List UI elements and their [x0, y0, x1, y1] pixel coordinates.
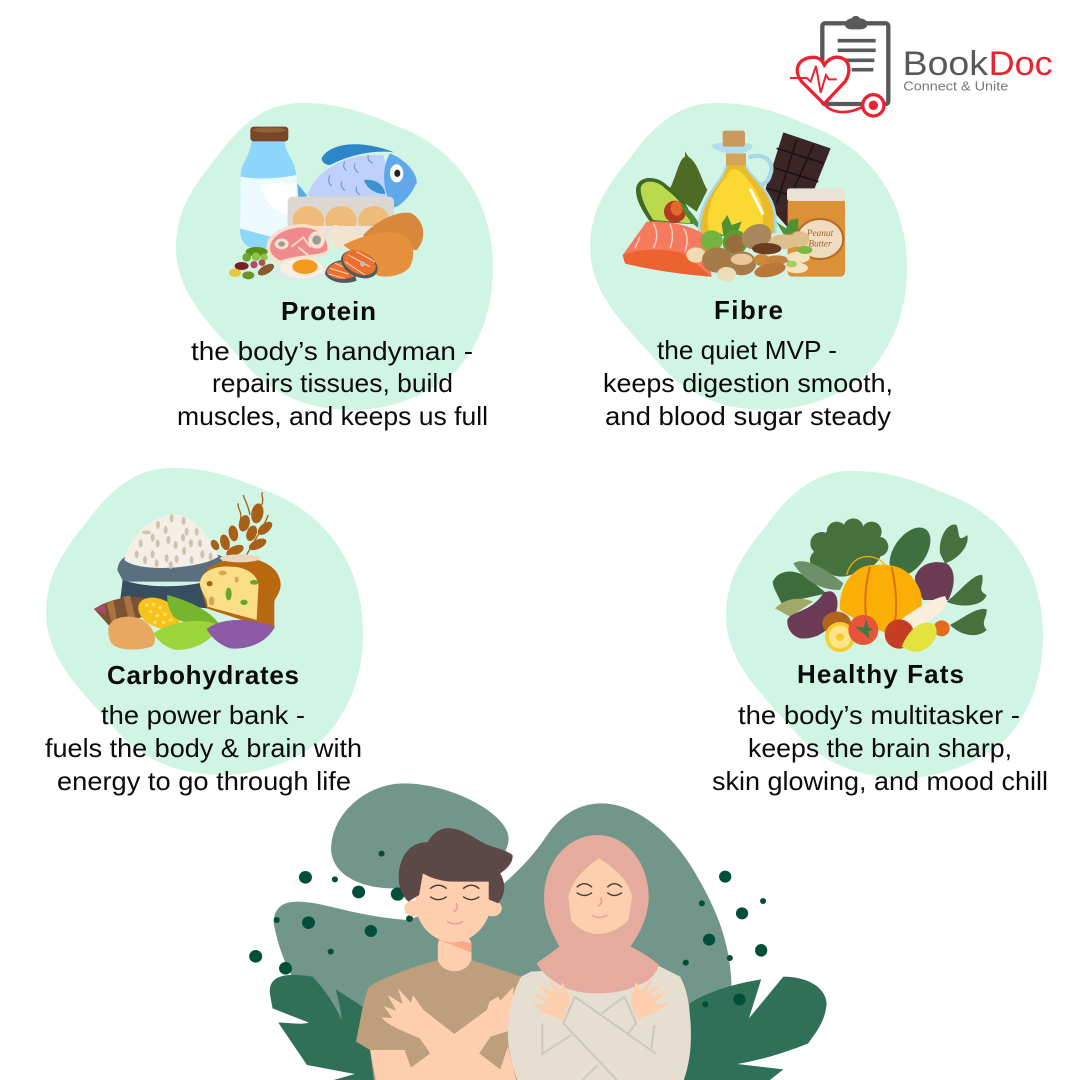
heading: Protein: Protein: [281, 296, 376, 326]
fibre description: [603, 335, 893, 431]
heading: Fibre: Fibre: [714, 295, 783, 325]
illustration: couple hugging themselves: [249, 783, 827, 1080]
panel: healthy fats: [712, 471, 1048, 796]
leaves: [270, 975, 827, 1080]
icon: carbohydrate foods: [93, 492, 281, 650]
carbohydrates background blob: [46, 468, 363, 775]
carbohydrates description: the power bank -: [101, 700, 305, 730]
icon: vegetables and fruit: [773, 518, 987, 652]
background blobs: [274, 783, 732, 1047]
wordmark: Book: [903, 45, 989, 83]
healthy fats background blob: [726, 471, 1043, 778]
man: [356, 828, 521, 1080]
icon: clipboard: [822, 16, 888, 104]
fibre description: and blood sugar steady: [605, 401, 891, 431]
protein description: the body’s handyman -: [191, 336, 473, 366]
protein description: [177, 336, 488, 431]
icon: fibre foods: [623, 131, 845, 282]
protein description: repairs tissues, build: [212, 368, 453, 398]
dots: [249, 851, 767, 1007]
carbohydrates description: energy to go through life: [57, 766, 351, 796]
panel: protein: [176, 103, 493, 431]
icon: heart and stethoscope: [790, 57, 884, 116]
heading: Carbohydrates: Carbohydrates: [107, 660, 299, 690]
panel: fibre: [590, 103, 907, 431]
icon: fibre foods: Butter: [808, 240, 832, 250]
icon: fibre foods: Peanut: [806, 229, 834, 239]
protein description: muscles, and keeps us full: [177, 401, 488, 431]
protein background blob: [176, 103, 493, 410]
tagline: Connect & Unite: [903, 79, 1008, 94]
woman: [508, 835, 691, 1080]
healthy fats description: keeps the brain sharp,: [748, 733, 1012, 763]
fibre background blob: [590, 103, 907, 410]
logo: BookDoc: [790, 16, 1053, 116]
panel: carbohydrates: [45, 468, 363, 796]
heading: Healthy Fats: Healthy Fats: [797, 659, 964, 689]
carbohydrates description: [45, 700, 362, 796]
healthy fats description: the body’s multitasker -: [738, 700, 1020, 730]
healthy fats description: [712, 700, 1048, 796]
wordmark accent: Doc: [989, 45, 1053, 83]
carbohydrates description: fuels the body & brain with: [45, 733, 362, 763]
fibre description: keeps digestion smooth,: [603, 368, 893, 398]
healthy fats description: skin glowing, and mood chill: [712, 766, 1048, 796]
fibre description: the quiet MVP -: [657, 335, 837, 365]
icon: protein foods: [229, 127, 423, 284]
